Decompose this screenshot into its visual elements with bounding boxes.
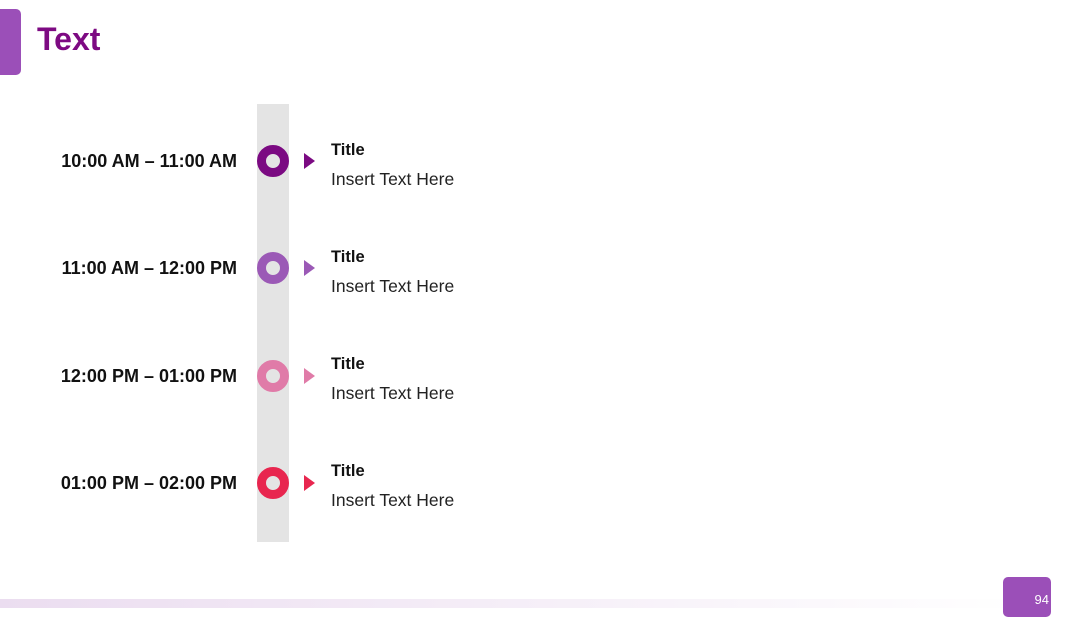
page number: 94 <box>1035 592 1049 607</box>
row 4 <box>61 462 454 510</box>
row 4: Insert Text Here <box>331 490 454 510</box>
row 2 <box>62 248 454 296</box>
row 1: Insert Text Here <box>331 169 454 189</box>
timeline bar <box>257 104 289 542</box>
row 1 <box>61 141 454 189</box>
row 3: 12:00 PM – 01:00 PM <box>61 366 237 386</box>
row 4: 01:00 PM – 02:00 PM <box>61 473 237 493</box>
title tab <box>0 9 21 75</box>
row 3 <box>61 355 454 403</box>
row 2: Insert Text Here <box>331 276 454 296</box>
title: Text <box>37 21 100 57</box>
row 1: 10:00 AM – 11:00 AM <box>61 151 237 171</box>
page number <box>1003 577 1051 617</box>
footer gradient <box>0 599 1080 608</box>
row 2: Title <box>331 248 365 266</box>
row 1: Title <box>331 141 365 159</box>
row 3: Insert Text Here <box>331 383 454 403</box>
row 3: Title <box>331 355 365 373</box>
row 4: Title <box>331 462 365 480</box>
row 2: 11:00 AM – 12:00 PM <box>62 258 237 278</box>
